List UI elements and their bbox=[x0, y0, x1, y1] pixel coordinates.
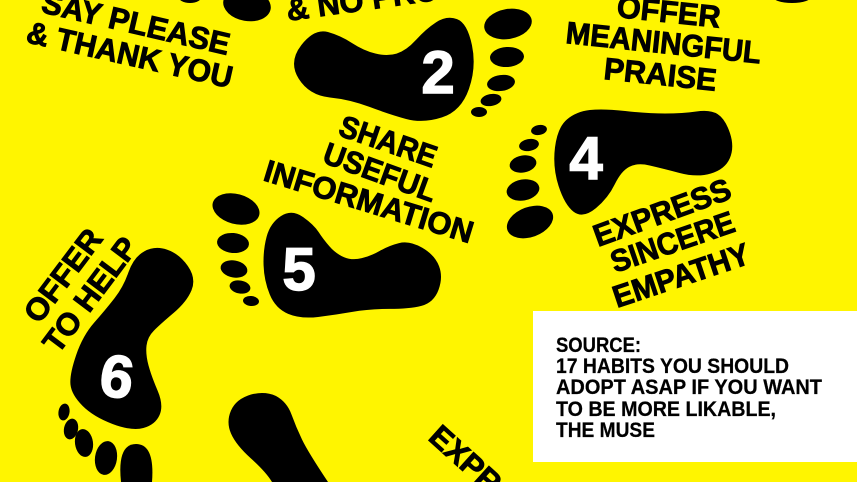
label: say please and thank you: & THANK YOU bbox=[23, 15, 236, 95]
number 2: 2 bbox=[421, 39, 455, 106]
footprint 7: cropped at bottom edge bbox=[228, 393, 328, 482]
label: express sincere empathy: EXPRESS bbox=[588, 171, 736, 254]
footprint 4 bbox=[502, 111, 731, 244]
source text: TO BE MORE LIKABLE, bbox=[556, 398, 776, 421]
label: offer to help: TO HELP bbox=[36, 230, 145, 359]
label: share useful information: INFORMATION bbox=[260, 153, 478, 250]
label: express sincere empathy bbox=[588, 171, 754, 315]
footprint 5 bbox=[209, 188, 440, 316]
source text: 17 HABITS YOU SHOULD bbox=[556, 355, 789, 378]
label: express sincere empathy: SINCERE bbox=[606, 205, 739, 280]
number 4: 4 bbox=[569, 125, 603, 192]
footprint 6 bbox=[57, 249, 192, 482]
source text bbox=[556, 334, 822, 442]
footprint 2 bbox=[296, 5, 534, 119]
label: offer to help: OFFER bbox=[17, 222, 110, 329]
label: offer meaningful praise: PRAISE bbox=[602, 51, 718, 98]
number 5: 5 bbox=[282, 236, 316, 303]
label: share useful information: USEFUL bbox=[319, 136, 441, 209]
source text: THE MUSE bbox=[556, 419, 655, 442]
label: express sincere empathy: EMPATHY bbox=[608, 236, 754, 315]
number 6: 6 bbox=[96, 341, 138, 412]
label: offer meaningful praise bbox=[564, 0, 763, 98]
footprint 1: cropped toes at top edge bbox=[178, 0, 812, 25]
label: offer meaningful praise: MEANINGFUL bbox=[564, 15, 763, 70]
label: share useful information bbox=[260, 109, 478, 250]
source text: SOURCE: bbox=[556, 334, 641, 357]
big toe of footprint 6 bbox=[120, 444, 152, 482]
source text: ADOPT ASAP IF YOU WANT bbox=[556, 376, 822, 399]
source panel bbox=[533, 311, 857, 462]
label: share useful information: SHARE bbox=[335, 109, 442, 175]
